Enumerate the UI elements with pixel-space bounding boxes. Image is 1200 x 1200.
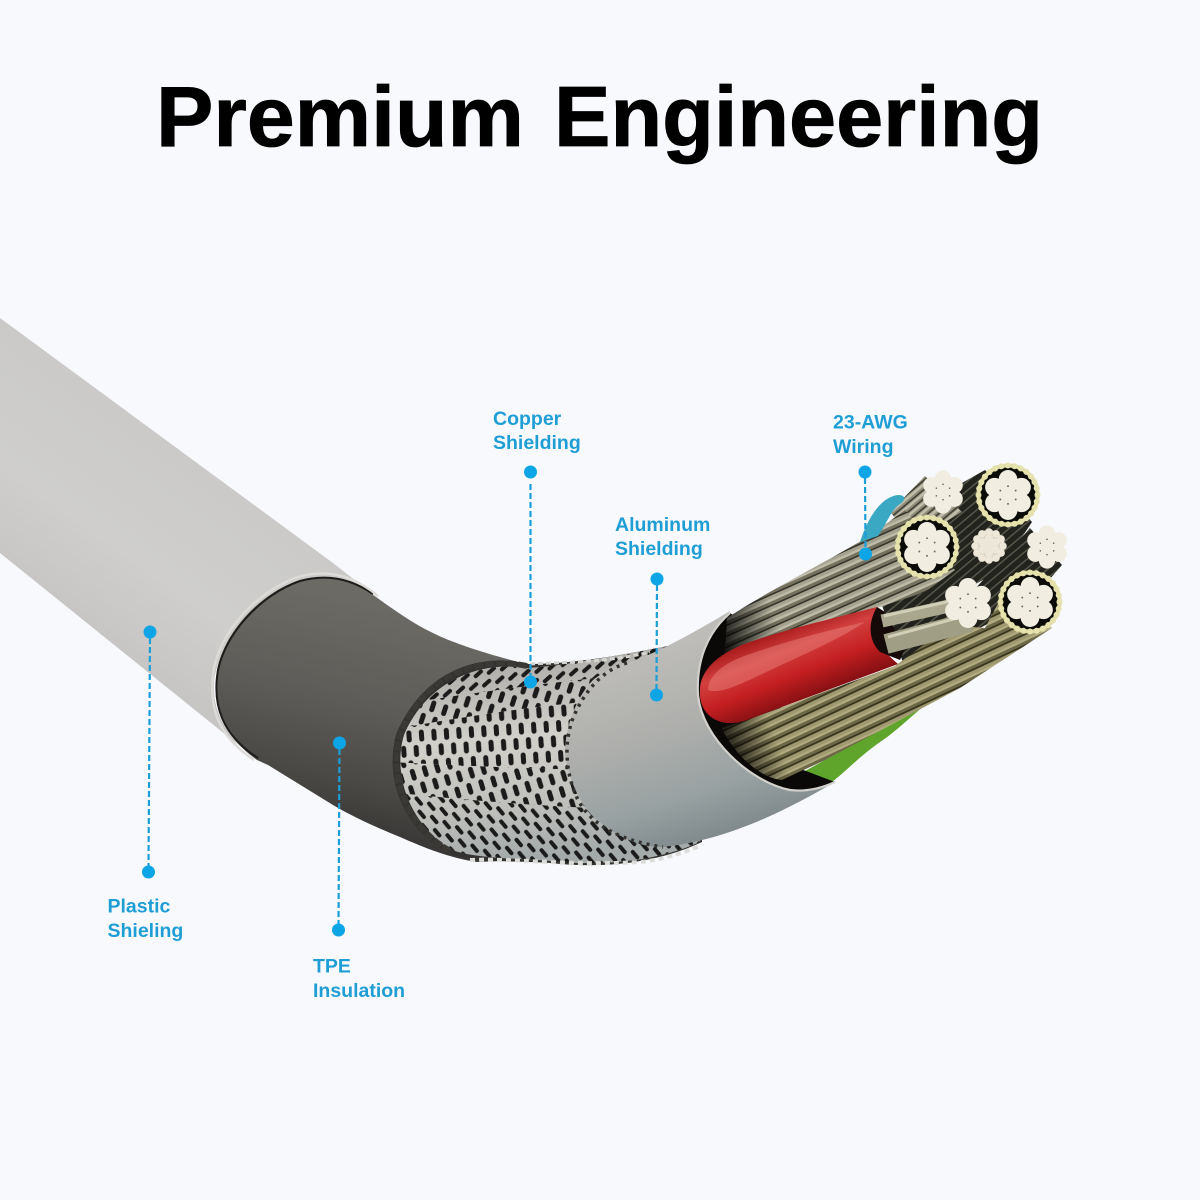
label: TPE bbox=[313, 956, 351, 978]
leader line bbox=[148, 638, 150, 866]
cable layer: TPE insulation bbox=[212, 573, 530, 862]
label: Copper bbox=[493, 408, 562, 430]
callout: Plastic Shieling bbox=[108, 626, 183, 942]
anchor dot bbox=[858, 466, 872, 478]
end dot bbox=[650, 688, 663, 702]
end dot bbox=[524, 676, 537, 688]
cable opening bbox=[698, 613, 835, 791]
cable layer: aluminum shielding bbox=[565, 611, 835, 847]
end face: gold ring top right bbox=[978, 465, 1038, 525]
title: Engineering bbox=[554, 70, 1043, 165]
end face: bare strand lower bbox=[945, 578, 991, 628]
label: Shieling bbox=[108, 920, 183, 942]
label: Shielding bbox=[493, 432, 581, 454]
cable layer: plastic outer jacket bbox=[0, 318, 383, 760]
callout: Copper Shielding bbox=[493, 408, 581, 688]
title: Premium bbox=[156, 70, 524, 165]
end dot bbox=[859, 548, 872, 560]
label: Shielding bbox=[615, 538, 703, 560]
callout: TPE Insulation bbox=[313, 736, 405, 1002]
end dot bbox=[332, 924, 345, 936]
anchor dot bbox=[650, 572, 664, 586]
label: Wiring bbox=[833, 436, 893, 458]
anchor dot bbox=[524, 466, 537, 478]
label: Plastic bbox=[108, 896, 171, 918]
title bbox=[156, 70, 1043, 165]
end dot bbox=[142, 866, 155, 878]
cable illustration bbox=[0, 318, 1067, 870]
leader line bbox=[864, 478, 867, 548]
wires: lower strand bundle bbox=[722, 590, 1052, 780]
end face: bare strand right bbox=[1027, 525, 1067, 569]
label: Aluminum bbox=[615, 514, 710, 536]
wires behind the end faces bbox=[880, 470, 1062, 668]
callout: 23-AWG Wiring bbox=[833, 412, 908, 560]
cable layer: copper braided shielding bbox=[392, 646, 702, 866]
end face: gold ring lower right bbox=[1000, 572, 1060, 632]
end face: bare strand top bbox=[923, 470, 963, 514]
anchor dot bbox=[144, 626, 156, 638]
wires: upper strand bundle bbox=[725, 510, 955, 662]
label: 23-AWG bbox=[833, 412, 908, 434]
end face: fine strand centre bbox=[971, 528, 1007, 564]
wires: red conductor bbox=[700, 600, 970, 723]
leader line bbox=[338, 749, 340, 924]
cable layer: green conductor bbox=[785, 705, 925, 786]
leader line bbox=[529, 484, 532, 676]
wire end faces bbox=[897, 465, 1067, 632]
callout: Aluminum Shielding bbox=[615, 514, 710, 702]
leader line bbox=[655, 585, 658, 689]
wires: blue conductor bbox=[860, 495, 904, 542]
end face: gold ring left bbox=[897, 517, 957, 577]
anchor dot bbox=[333, 736, 346, 750]
cable opening lip bbox=[698, 613, 835, 791]
label: Insulation bbox=[313, 980, 405, 1002]
